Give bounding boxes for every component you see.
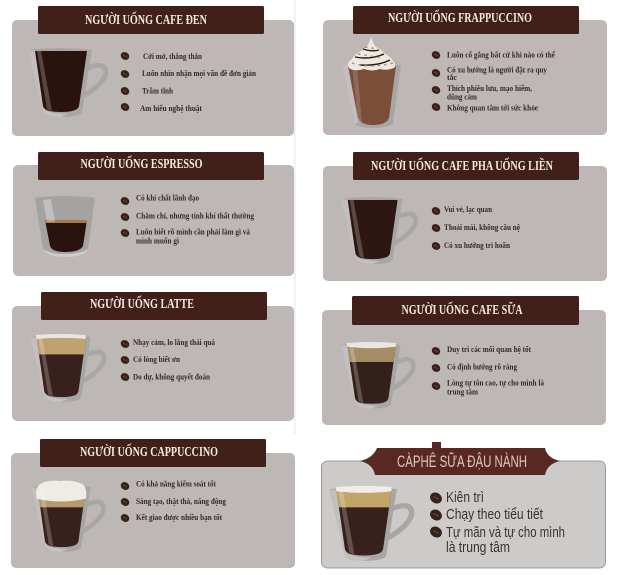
icon: instant coffee mug xyxy=(341,197,416,264)
list: instant coffee traits: Vui vẻ, lạc quan xyxy=(444,205,492,214)
list: latte traits: Có lòng biết ơn xyxy=(133,355,180,364)
list: cappuccino traits: Kết giao được nhiều bạn tốt xyxy=(136,513,222,522)
heading: cafe pha uong lien: NGƯỜI UỐNG CAFE PHA UỐNG LIỀN xyxy=(371,158,553,173)
panel: frappuccino xyxy=(323,6,607,135)
panel: cappuccino xyxy=(11,439,295,568)
list: latte traits xyxy=(119,338,216,382)
list: cafe den traits: Trầm tĩnh xyxy=(142,86,173,96)
heading: frappuccino: NGƯỜI UỐNG FRAPPUCCINO xyxy=(388,10,532,25)
icon: soy milk coffee mug xyxy=(329,486,412,564)
list: espresso traits: mình muốn gì xyxy=(136,236,180,246)
list: latte traits: Nhạy cảm, lo lắng thái quá xyxy=(133,338,216,347)
heading: caphe sua dau nanh xyxy=(360,442,560,475)
list: espresso traits: Có khí chất lãnh đạo xyxy=(136,194,199,202)
list: soy coffee traits: là trung tâm xyxy=(446,540,510,556)
icon: frappuccino cup xyxy=(342,37,401,128)
list: frappuccino traits: Có xu hướng là người đặt ra quy xyxy=(447,66,548,74)
heading: cappuccino xyxy=(40,439,266,467)
list: espresso traits: Luôn biết rõ mình cần phải làm gì và xyxy=(136,228,251,236)
panel: caphe sua dau nanh xyxy=(322,442,606,568)
list: soy coffee traits: Tự mãn và tự cho mình xyxy=(446,525,565,541)
divider xyxy=(294,0,296,434)
heading: cafe sua: NGƯỜI UỐNG CAFE SỮA xyxy=(402,302,523,317)
list: soy coffee traits: Kiên trì xyxy=(446,490,484,506)
heading: latte: NGƯỜI UỐNG LATTE xyxy=(90,296,194,311)
list: cafe sua traits xyxy=(430,345,545,396)
list: frappuccino traits: tắc xyxy=(447,73,457,82)
icon: espresso glass xyxy=(35,196,95,257)
heading: latte xyxy=(41,292,267,320)
list: frappuccino traits: Luôn cố gắng bất cứ khi nào có thể xyxy=(447,50,555,60)
heading: cappuccino: NGƯỜI UỐNG CAPPUCCINO xyxy=(80,444,218,459)
heading: cafe sua xyxy=(352,296,579,325)
list: cafe sua traits: trung tâm xyxy=(447,388,478,396)
list: soy coffee traits xyxy=(428,490,565,556)
list: instant coffee traits: Thoải mái, không câu nệ xyxy=(444,223,520,232)
list: cafe den traits xyxy=(119,51,256,113)
list: espresso traits: Chăm chỉ, nhưng tính khí thất thường xyxy=(136,212,255,220)
icon: latte mug xyxy=(30,334,104,405)
list: instant coffee traits xyxy=(430,205,520,251)
list: cappuccino traits: Có khả năng kiểm soát tốt xyxy=(136,480,216,488)
icon: cappuccino mug xyxy=(31,481,104,555)
list: cafe sua traits: Duy trì các mối quan hệ tốt xyxy=(447,345,531,354)
list: cafe den traits: Cởi mở, thẳng thắn xyxy=(143,52,202,61)
list: espresso traits xyxy=(119,194,255,246)
heading: espresso xyxy=(38,152,264,180)
icon: milk coffee mug xyxy=(341,342,414,411)
panel: cafe pha uong lien xyxy=(323,152,607,281)
list: cappuccino traits xyxy=(119,480,227,523)
list: cafe sua traits: Có định hướng rõ ràng xyxy=(447,362,518,372)
list: instant coffee traits: Có xu hướng trì hoãn xyxy=(444,241,510,250)
heading: frappuccino xyxy=(353,6,579,34)
heading: caphe sua dau nanh: CÀPHÊ SỮA ĐẬU NÀNH xyxy=(397,451,527,471)
icon: black coffee mug xyxy=(28,48,106,117)
heading: cafe den xyxy=(38,6,264,34)
panel: espresso xyxy=(13,152,294,276)
panel: cafe den xyxy=(12,6,294,136)
list: frappuccino traits: Thích phiêu lưu, mạo hiểm, xyxy=(447,84,532,93)
heading: cafe pha uong lien xyxy=(353,152,579,180)
panel: cafe sua xyxy=(322,296,606,425)
list: cafe den traits: Am hiểu nghệ thuật xyxy=(140,104,202,113)
list: cafe sua traits: Lòng tự tôn cao, tự cho mình là xyxy=(447,378,545,388)
panel: latte xyxy=(12,292,294,421)
list: cafe den traits: Luôn nhìn nhận mọi vấn đề đơn giản xyxy=(142,69,256,78)
list: soy coffee traits: Chạy theo tiểu tiết xyxy=(446,507,543,523)
list: frappuccino traits: Không quan tâm tới sức khỏe xyxy=(447,104,538,112)
list: frappuccino traits xyxy=(430,50,555,112)
heading: cafe den: NGƯỜI UỐNG CAFE ĐEN xyxy=(85,12,207,27)
heading: espresso: NGƯỜI UỐNG ESPRESSO xyxy=(80,156,202,171)
list: frappuccino traits: dũng cảm xyxy=(447,92,477,102)
list: latte traits: Do dự, không quyết đoán xyxy=(133,372,210,382)
list: cappuccino traits: Sáng tạo, thật thà, năng động xyxy=(136,497,227,506)
